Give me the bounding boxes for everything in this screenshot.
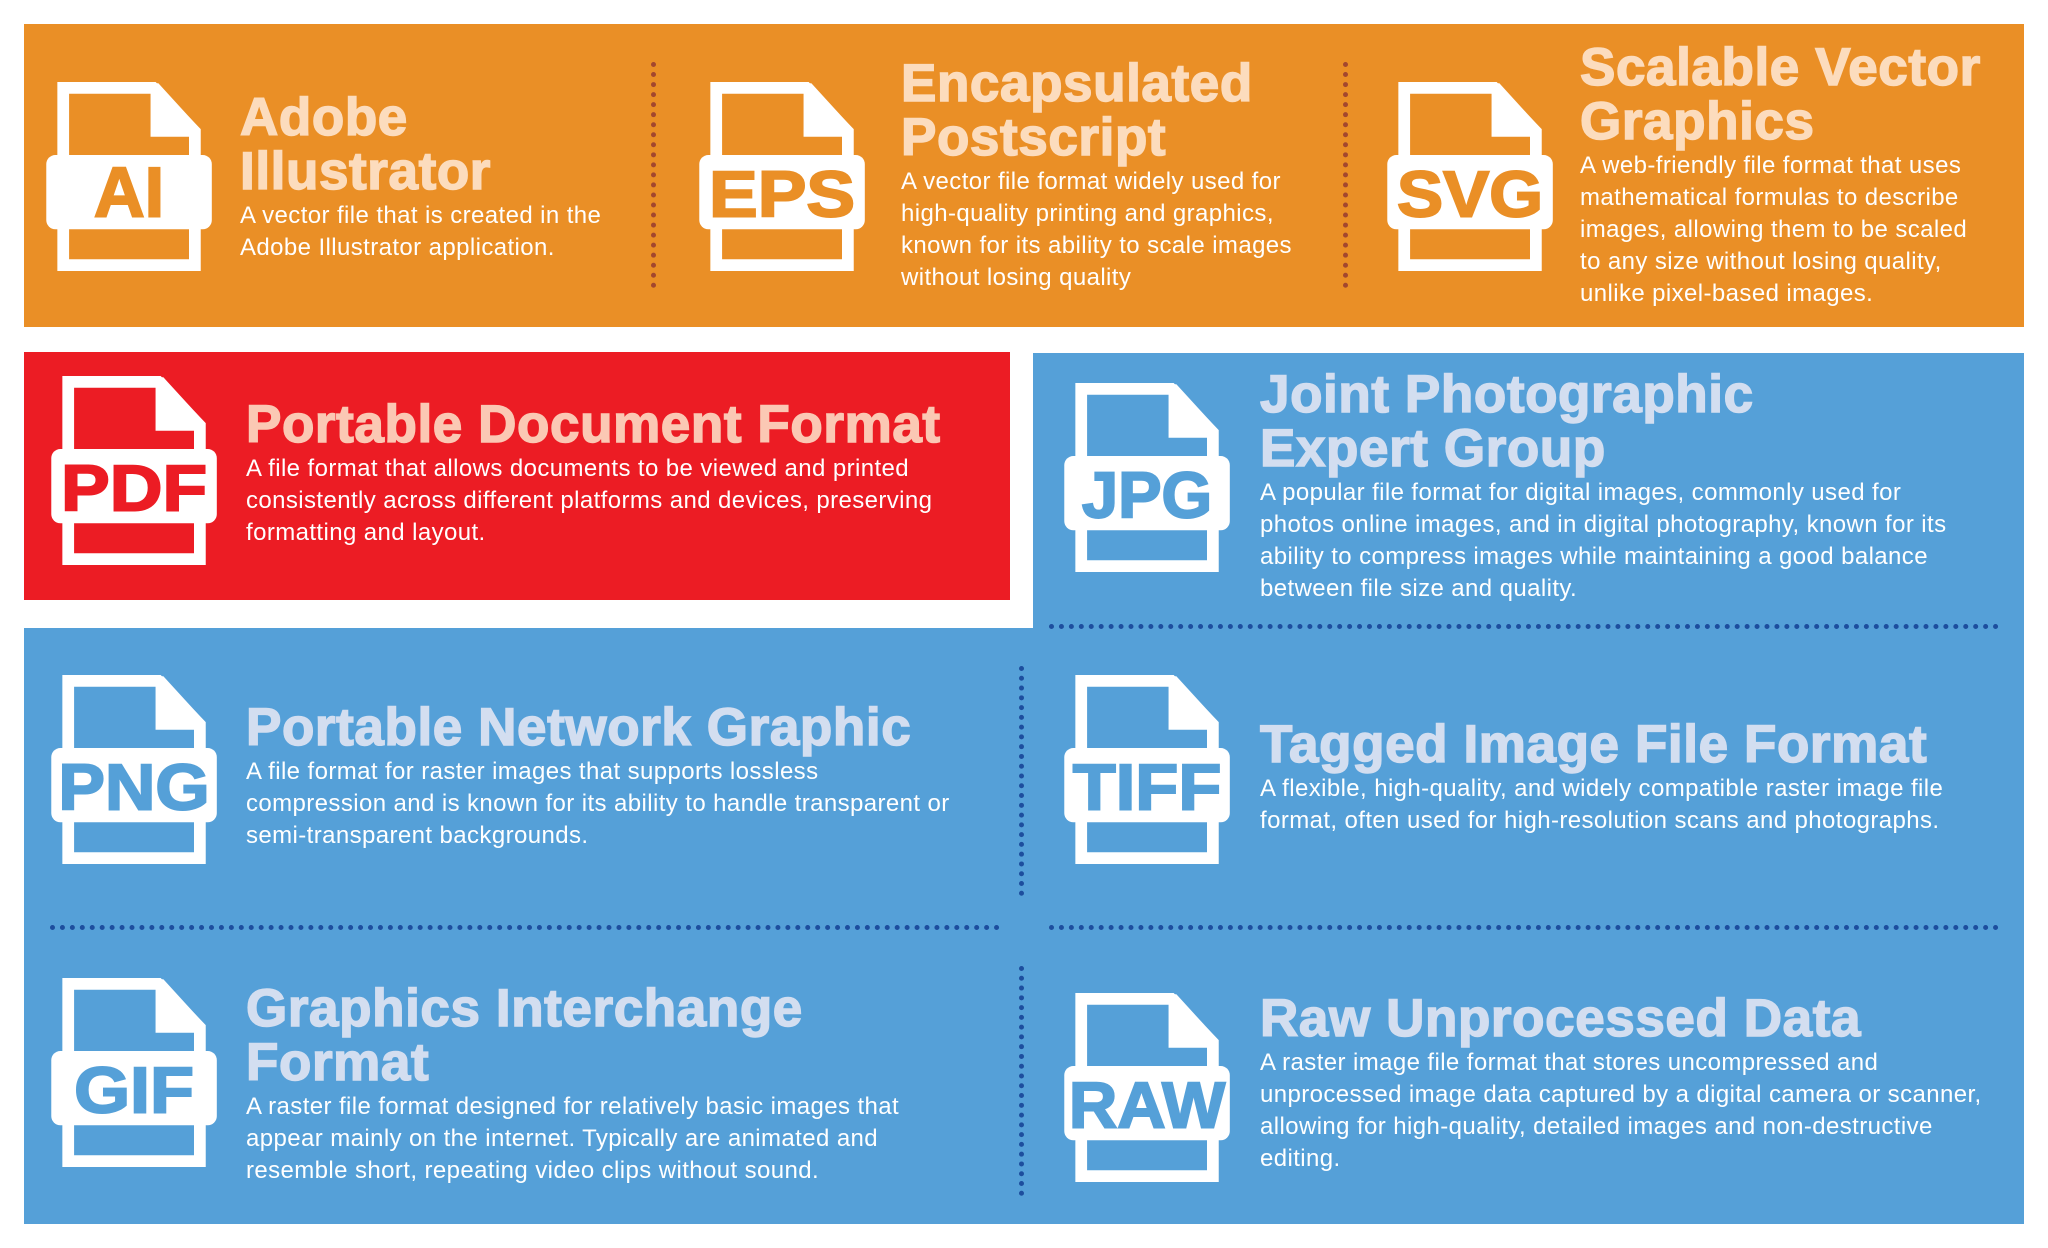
text block: Tagged Image File Format: A flexible, high-quality, and widely compatible raster image file — [1260, 775, 1943, 802]
icon: RAW file: RAW — [1069, 1068, 1226, 1141]
panel: blue JPG block — [1033, 353, 2024, 633]
text block: Adobe Illustrator: Illustrator — [240, 142, 491, 201]
text block: Scalable Vector Graphics: unlike pixel-based images. — [1580, 280, 1873, 307]
text block: Joint Photographic Expert Group: photos online images, and in digital photography, known for its — [1260, 511, 1947, 538]
text block: Scalable Vector Graphics: images, allowing them to be scaled — [1580, 216, 1967, 243]
icon: RAW file — [1064, 993, 1230, 1182]
icon: PDF file: PDF — [61, 451, 207, 524]
panel: red PDF — [24, 352, 1010, 600]
panel: orange vector formats — [24, 24, 2024, 327]
text block: Encapsulated Postscript: without losing quality — [901, 264, 1131, 291]
text block: Graphics Interchange Format: Format — [246, 1033, 429, 1092]
text block: Adobe Illustrator: A vector file that is created in the — [240, 202, 601, 229]
text block: Graphics Interchange Format: resemble short, repeating video clips without sound. — [246, 1157, 819, 1184]
icon: JPG file — [1064, 383, 1230, 572]
text block: Graphics Interchange Format — [246, 979, 899, 1184]
text block: Encapsulated Postscript: high-quality printing and graphics, — [901, 200, 1274, 227]
text block: Scalable Vector Graphics — [1580, 38, 1981, 307]
icon: AI file — [46, 82, 212, 271]
text block: Raw Unprocessed Data — [1260, 989, 1982, 1172]
text block: Portable Network Graphic — [246, 698, 950, 849]
icon: JPG file: JPG — [1082, 458, 1212, 531]
text block: Scalable Vector Graphics: A web-friendly file format that uses — [1580, 152, 1961, 179]
text block: Scalable Vector Graphics: Scalable Vector — [1580, 38, 1981, 97]
text block: Encapsulated Postscript: A vector file format widely used for — [901, 168, 1281, 195]
text block: Portable Network Graphic: semi-transparent backgrounds. — [246, 822, 588, 849]
text block: Graphics Interchange Format: Graphics Interchange — [246, 979, 803, 1038]
text block: Adobe Illustrator: Adobe Illustrator application. — [240, 234, 555, 261]
icon: SVG file: SVG — [1397, 157, 1543, 230]
text block: Raw Unprocessed Data: A raster image file format that stores uncompressed and — [1260, 1049, 1878, 1076]
text block: Encapsulated Postscript: Encapsulated — [901, 54, 1253, 113]
icon: AI file: AI — [94, 152, 164, 231]
icon: TIFF file: TIFF — [1073, 750, 1221, 823]
text block: Portable Network Graphic: compression and is known for its ability to handle transparent or — [246, 790, 950, 817]
text block: Tagged Image File Format: format, often used for high-resolution scans and photographs. — [1260, 807, 1939, 834]
text block: Scalable Vector Graphics: to any size without losing quality, — [1580, 248, 1942, 275]
text block: Raw Unprocessed Data: editing. — [1260, 1145, 1341, 1172]
text block: Joint Photographic Expert Group: A popular file format for digital images, commonly used for — [1260, 479, 1901, 506]
icon: SVG file — [1387, 82, 1553, 271]
text block: Joint Photographic Expert Group: between file size and quality. — [1260, 575, 1577, 602]
panel: blue raster formats — [24, 628, 2024, 1224]
text block: Raw Unprocessed Data: Raw Unprocessed Data — [1260, 989, 1861, 1048]
text block: Portable Document Format: Portable Document Format — [246, 395, 941, 454]
text block: Tagged Image File Format: Tagged Image File Format — [1260, 715, 1927, 774]
text block: Portable Network Graphic: A file format for raster images that supports lossless — [246, 758, 818, 785]
icon: PNG file — [51, 675, 217, 864]
text block: Joint Photographic Expert Group — [1260, 365, 1947, 602]
text block: Scalable Vector Graphics: Graphics — [1580, 92, 1815, 151]
icon: TIFF file — [1064, 675, 1230, 864]
text block: Raw Unprocessed Data: allowing for high-quality, detailed images and non-destructive — [1260, 1113, 1933, 1140]
icon: EPS file — [699, 82, 865, 271]
text block: Adobe Illustrator: Adobe — [240, 88, 408, 147]
icon: EPS file: EPS — [709, 157, 855, 230]
text block: Scalable Vector Graphics: mathematical formulas to describe — [1580, 184, 1959, 211]
text block: Portable Network Graphic: Portable Network Graphic — [246, 698, 911, 757]
text block: Graphics Interchange Format: appear mainly on the internet. Typically are animated and — [246, 1125, 878, 1152]
text block: Encapsulated Postscript — [901, 54, 1292, 291]
text block: Portable Document Format — [246, 395, 941, 546]
text block: Raw Unprocessed Data: unprocessed image data captured by a digital camera or scanner, — [1260, 1081, 1982, 1108]
icon: GIF file — [51, 978, 217, 1167]
text block: Encapsulated Postscript: Postscript — [901, 108, 1166, 167]
text block: Joint Photographic Expert Group: Expert Group — [1260, 419, 1606, 478]
text block: Encapsulated Postscript: known for its ability to scale images — [901, 232, 1292, 259]
text block: Joint Photographic Expert Group: Joint Photographic — [1260, 365, 1754, 424]
icon: GIF file: GIF — [74, 1053, 194, 1126]
text block: Adobe Illustrator — [240, 88, 601, 261]
icon: PDF file — [51, 376, 217, 565]
text block: Portable Document Format: formatting and layout. — [246, 519, 486, 546]
text block: Tagged Image File Format — [1260, 715, 1943, 834]
text block: Joint Photographic Expert Group: ability to compress images while maintaining a good balance — [1260, 543, 1928, 570]
text block: Graphics Interchange Format: A raster file format designed for relatively basic images that — [246, 1093, 899, 1120]
text block: Portable Document Format: consistently across different platforms and devices, preserving — [246, 487, 932, 514]
text block: Portable Document Format: A file format that allows documents to be viewed and printed — [246, 455, 909, 482]
icon: PNG file: PNG — [58, 750, 210, 823]
